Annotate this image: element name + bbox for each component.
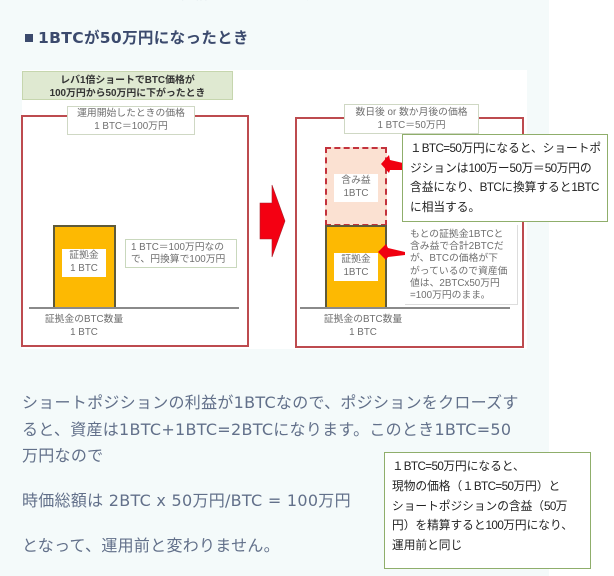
note: asset value: がっているので資産価 — [410, 266, 507, 277]
label: start price: 1 BTC＝100万円 — [94, 120, 168, 132]
callout: short position profit: ジションは100万ー50万＝50万円の — [410, 162, 592, 175]
label: later price: 1 BTC＝50万円 — [377, 120, 446, 130]
label: margin: 1BTC — [343, 266, 369, 278]
label: margin BTC quantity — [45, 314, 123, 338]
note: asset value — [405, 225, 518, 305]
note: yen conversion — [125, 239, 237, 268]
callout: unchanged total: 運用前と同じ — [392, 539, 462, 552]
callout: short position profit: １BTC=50万円になると、ショートポ — [410, 142, 601, 155]
callout: unchanged total: 円）を精算すると100万円になり、 — [392, 519, 573, 532]
callout: unchanged total — [384, 452, 591, 569]
diagram background — [22, 70, 527, 349]
note: asset value: 含み益で合計2BTCだ — [410, 241, 504, 252]
note: asset value: 値は、2BTCx50万円 — [410, 278, 500, 289]
panel: start of operation — [21, 115, 249, 347]
label: margin BTC quantity: 1 BTC — [70, 326, 98, 338]
diagram title box — [22, 71, 233, 100]
diagram title box: 100万円から50万円に下がったとき — [50, 88, 205, 98]
label: margin — [334, 253, 378, 281]
text: body paragraph — [22, 393, 519, 465]
label: margin BTC quantity: 証拠金のBTC数量 — [324, 314, 402, 325]
label: margin: 証拠金 — [341, 254, 371, 265]
callout: short position profit — [402, 134, 608, 222]
label: margin BTC quantity: 1 BTC — [349, 326, 377, 338]
label: unrealized profit: 1BTC — [343, 188, 369, 198]
note: asset value: =100万円のまま。 — [410, 290, 490, 301]
label: margin: 証拠金 — [69, 250, 99, 261]
text: conclusion: となって、運用前と変わりません。 — [22, 536, 280, 555]
label: margin: 1 BTC — [70, 262, 98, 274]
bar: unrealized profit — [325, 147, 387, 226]
label: unrealized profit: 含み益 — [341, 175, 371, 186]
callout: unchanged total: 現物の価格（１BTC=50万円）と — [392, 480, 560, 493]
callout: short position profit: に相当する。 — [410, 201, 480, 214]
bar: margin 1BTC — [325, 225, 387, 308]
arrow: transition — [260, 184, 286, 258]
label: margin — [62, 249, 106, 277]
note: yen conversion: で、円換算で100万円 — [131, 254, 225, 265]
label: later price — [344, 104, 479, 134]
text: body paragraph: 万円なので — [22, 446, 103, 465]
arrow: pointer to unrealized profit — [381, 155, 402, 173]
callout: short position profit: 含益になり、BTCに換算すると1BTC — [410, 181, 599, 194]
diagram title box: レバ1倍ショートでBTC価格が — [60, 74, 195, 86]
baseline left — [29, 307, 239, 309]
label: unrealized profit — [334, 174, 378, 202]
label: margin BTC quantity — [324, 314, 402, 338]
panel: days or months later — [295, 117, 524, 348]
label: start price: 運用開始したときの価格 — [77, 108, 185, 119]
baseline right — [300, 307, 510, 309]
label: margin BTC quantity: 証拠金のBTC数量 — [45, 314, 123, 325]
text: body paragraph: ショートポジションの利益が1BTCなので、ポジションをクローズす — [22, 393, 519, 412]
text: body paragraph: ると、資産は1BTC+1BTC=2BTCになります。このとき1BTC=50 — [22, 420, 511, 438]
note: asset value: もとの証拠金1BTCと — [410, 229, 503, 240]
text: market value formula: 時価総額は 2BTC x 50万円/BTC = 100万円 — [22, 491, 351, 510]
callout: unchanged total: １BTC=50万円になると、 — [392, 460, 525, 473]
arrow: pointer to margin — [378, 244, 405, 260]
label: later price: 数日後 or 数か月後の価格 — [355, 107, 468, 118]
heading: 1BTCが50万円になったとき — [38, 29, 249, 47]
callout: unchanged total: ショートポジションの含益（50万 — [392, 500, 567, 513]
note: asset value: が、BTCの価格が下 — [410, 253, 498, 264]
label: start price — [67, 106, 195, 135]
bar: margin 1BTC — [53, 225, 116, 308]
note: yen conversion: 1 BTC＝100万円なの — [131, 242, 224, 253]
